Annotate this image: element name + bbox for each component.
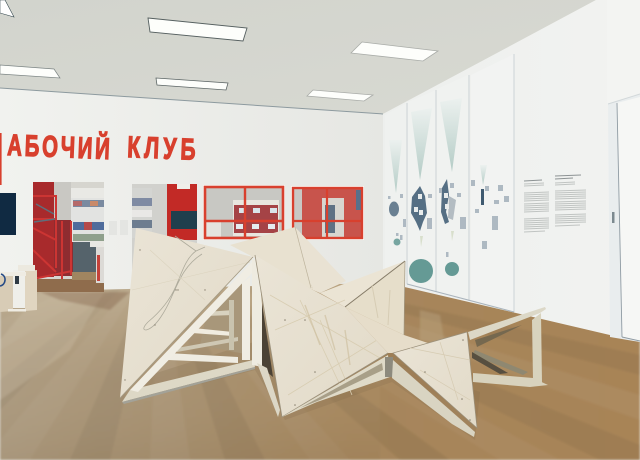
ceiling and wall joint bbox=[0, 88, 383, 114]
right wall bbox=[383, 0, 640, 342]
ceiling light: centre small bbox=[156, 78, 228, 90]
wall heading bbox=[7, 127, 200, 167]
wooden floor bbox=[0, 250, 640, 460]
ceiling light: right small bbox=[307, 90, 373, 101]
plywood plinth with object bbox=[0, 265, 37, 312]
red bar of cut off letter bbox=[0, 133, 2, 185]
sculpture: right frame bbox=[468, 307, 548, 387]
door with frame and handle bbox=[607, 0, 640, 342]
wall panel: fourth graphic bbox=[471, 54, 514, 312]
wall text: right column bbox=[555, 175, 586, 226]
wall screen bbox=[0, 193, 16, 235]
wall heading: КЛУБ bbox=[127, 132, 200, 167]
ceiling bbox=[0, 0, 596, 114]
red framed window right bbox=[291, 186, 364, 240]
sculpture: centre lower beams bbox=[282, 355, 393, 417]
wall panel: third graphic bbox=[437, 75, 468, 301]
wall panel: second graphic bbox=[408, 90, 436, 292]
sculpture: central plywood panel bbox=[255, 255, 388, 417]
panel seams bbox=[407, 54, 514, 312]
sculpture: central post bbox=[252, 258, 280, 417]
ceiling light: left bbox=[0, 65, 60, 78]
ceiling light: centre large bbox=[148, 18, 247, 41]
sculpture: right upright panel bbox=[320, 261, 405, 335]
sculpture: left inner framing bbox=[122, 277, 255, 404]
sculpture: left plywood panel with map bbox=[120, 228, 253, 398]
red framed window left bbox=[203, 185, 285, 240]
sculpture: front triangular panel bbox=[392, 332, 477, 437]
wall heading: АБОЧИЙ bbox=[7, 127, 113, 166]
sculpture: back plywood panels bbox=[230, 227, 346, 293]
sculpture: right floor strip bbox=[345, 307, 428, 353]
back wall bbox=[0, 88, 383, 292]
middle doorway with shelf and screen bbox=[132, 184, 197, 269]
left doorway with red structure and bookshelf bbox=[33, 182, 104, 292]
ceiling light: top left bbox=[0, 0, 14, 17]
ceiling light: right large bbox=[351, 42, 438, 61]
wall panel: first graphic bbox=[385, 103, 407, 284]
wall text: left column bbox=[524, 180, 549, 232]
shadow of sculpture on floor bbox=[125, 340, 480, 440]
wall labels between doorways bbox=[109, 220, 128, 235]
